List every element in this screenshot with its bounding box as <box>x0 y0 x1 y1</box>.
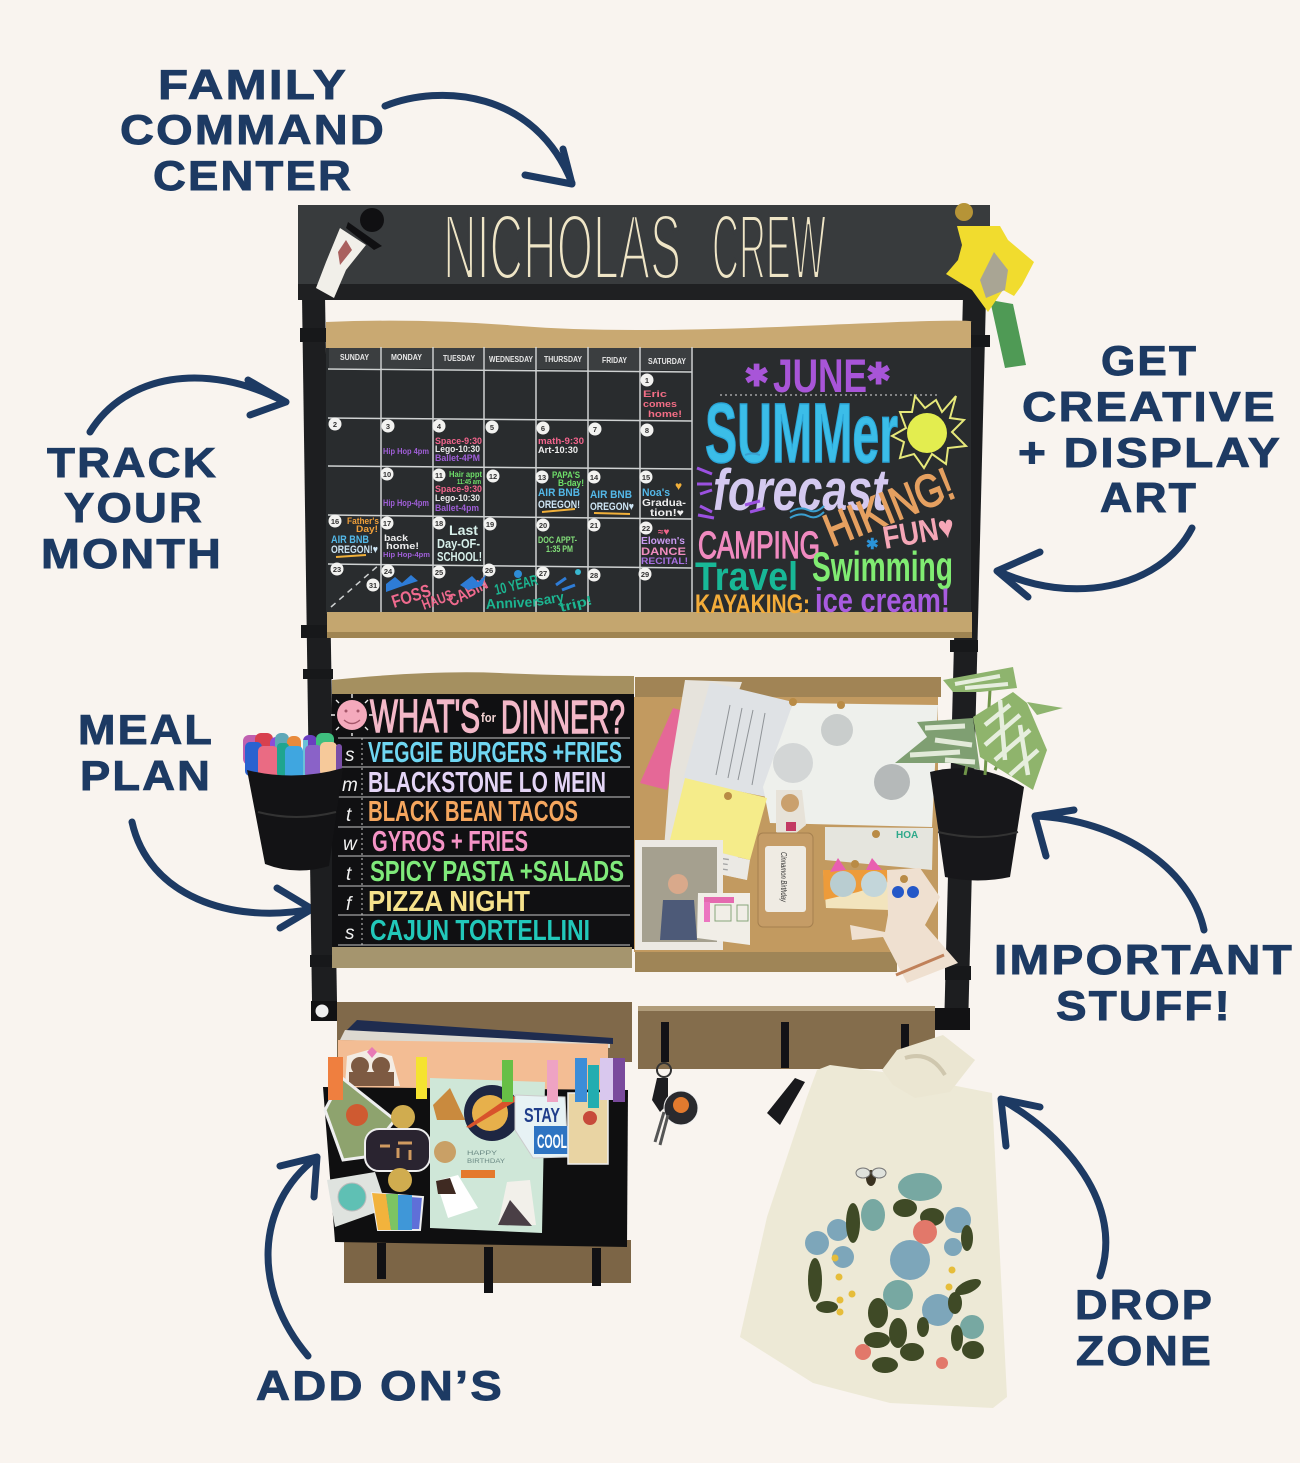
label: family command center: CENTER <box>153 152 353 199</box>
calendar entries: AIR BNB <box>331 534 369 546</box>
stay cool sticker: STAY <box>524 1105 560 1127</box>
calendar date circles: 6 <box>541 424 545 433</box>
icon: sun <box>892 396 966 468</box>
calendar entries: Eric <box>643 389 667 399</box>
calendar date circles: 10 <box>383 470 391 479</box>
icon: daffodil art on clip <box>946 203 1034 368</box>
calendar entries: ≈♥ <box>658 527 669 538</box>
ruled lines <box>338 738 630 945</box>
icon: keychain <box>652 1063 698 1145</box>
soap pack <box>327 1172 382 1227</box>
board name lettering: CREW <box>712 197 826 300</box>
calendar entries: back <box>384 533 409 543</box>
calendar weekday headers <box>329 348 691 370</box>
weekday letters: t <box>346 864 352 885</box>
cat drawing <box>823 858 890 910</box>
calendar date circles: 18 <box>435 519 443 528</box>
icon: car key fob <box>767 1078 805 1125</box>
calendar entries: Gradua- <box>642 498 686 509</box>
calendar entries: Last <box>449 522 478 538</box>
label: get creative and display art: + DISPLAY <box>1018 429 1282 476</box>
dog charm <box>776 790 806 838</box>
tarot card <box>568 1093 608 1164</box>
calendar weekday headers: TUESDAY <box>443 354 476 363</box>
weekday letters: t <box>346 805 352 826</box>
dance paper <box>663 840 750 880</box>
calendar entries: RECITAL! <box>641 556 688 566</box>
pink card <box>640 708 687 790</box>
calendar date circles: 13 <box>538 473 546 482</box>
stay cool sticker <box>515 1095 568 1158</box>
hiking: HIKING! <box>816 457 961 556</box>
summer: SUMMer <box>705 386 898 480</box>
calendar entries: math-9:30 <box>538 436 584 446</box>
calendar entries: Lego-10:30 <box>435 493 480 503</box>
label: get creative and display art <box>1018 337 1282 521</box>
embroidery flowers <box>805 1168 984 1373</box>
calendar entries: Noa's <box>642 487 670 499</box>
birthday card: BIRTHDAY <box>467 1159 505 1165</box>
calendar date circles: 25 <box>435 568 443 577</box>
tote handle knot <box>882 1035 975 1098</box>
white flyer <box>663 680 747 880</box>
meal list: PIZZA NIGHT <box>368 886 530 918</box>
bracket with date circle <box>311 1001 337 1021</box>
meal list: BLACKSTONE LO MEIN <box>368 767 606 799</box>
calendar entries: Ballet-4PM <box>435 453 480 463</box>
travel: Travel <box>695 555 798 599</box>
calendar entries: Hip Hop-4pm <box>383 552 430 559</box>
arrow: to meal board <box>132 822 312 928</box>
june heading: JUNE <box>773 349 867 402</box>
calendar weekday headers: MONDAY <box>391 353 423 362</box>
camping: CAMPING <box>698 525 820 567</box>
label: add on's: ADD ON’S <box>256 1362 504 1409</box>
calendar date circles: 16 <box>331 517 339 526</box>
calendar entries: DANCE <box>641 546 686 558</box>
icon: marker cup <box>243 733 343 871</box>
panel: corkboard <box>634 677 958 983</box>
calendar entries: Anniver <box>485 593 539 612</box>
panel: corkboard: HOA <box>896 830 918 841</box>
label: track your month: MONTH <box>41 530 223 577</box>
dinner title <box>370 690 625 743</box>
calendar date circles: 8 <box>645 426 649 435</box>
label: important stuff <box>994 936 1294 1029</box>
dinner title: for <box>481 710 496 725</box>
calendar entries: Father's <box>347 516 379 526</box>
calendar date circles: 2 <box>333 420 337 429</box>
yellow sticky note <box>670 778 767 860</box>
calendar entries: B-day! <box>558 478 584 488</box>
rainbow sticker <box>372 1168 423 1230</box>
calendar entries: DOC APPT- <box>538 535 577 545</box>
arrow: to header board <box>385 95 572 184</box>
calendar date circles: 12 <box>489 472 497 481</box>
calendar entries: comes <box>643 399 677 409</box>
calendar date circles: 27 <box>539 569 547 578</box>
calendar entries: FOSS <box>389 580 433 612</box>
calendar entries: AIR BNB <box>538 487 580 499</box>
luggage tag: Cinnamon Birthday <box>779 852 788 903</box>
panel: corkboard: DANCE <box>666 847 730 875</box>
arrow: to art chalkboard <box>997 528 1192 597</box>
weekday letters: s <box>345 923 355 944</box>
calendar date circles: 19 <box>486 520 494 529</box>
icon: potted plant <box>895 667 1063 880</box>
calendar entries: OREGON♥ <box>590 501 634 513</box>
label: important stuff: STUFF! <box>1056 982 1232 1029</box>
panel: what's for dinner board <box>331 672 634 968</box>
calendar entries: tion!♥ <box>650 508 684 519</box>
weekday letters: m <box>342 775 358 796</box>
calendar entries: trip! <box>558 592 594 615</box>
meal list: CAJUN TORTELLINI <box>370 915 590 947</box>
june heading: ✱ <box>866 358 891 391</box>
art: summer forecast lettering <box>695 349 966 620</box>
calendar entries: home! <box>386 541 419 551</box>
calendar entries: Elowen's <box>641 536 685 547</box>
calendar date circles: 1 <box>645 376 649 385</box>
icon: embroidered tote bag <box>740 1035 1007 1408</box>
label: drop zone: DROP <box>1075 1281 1214 1328</box>
label: drop zone <box>1075 1281 1214 1374</box>
label: get creative and display art: CREATIVE <box>1022 383 1277 430</box>
calendar entries: Day-OF- <box>437 536 480 551</box>
calendar entries: AIR BNB <box>590 489 632 501</box>
fun: FUN♥ <box>880 508 957 556</box>
label: track your month <box>41 439 223 577</box>
label: meal plan: PLAN <box>80 752 212 799</box>
arrow: to tote bag <box>1001 1099 1106 1276</box>
calendar grid <box>328 347 692 612</box>
notebook paper lines <box>716 705 765 785</box>
icon: dog charm on knob <box>316 208 384 298</box>
calendar entries <box>331 389 688 615</box>
swimming: Swimming <box>812 543 953 590</box>
label: family command center <box>120 61 386 199</box>
kayaking: KAYAKING: <box>695 589 810 619</box>
calendar entries: 10 YEAR <box>493 572 540 599</box>
hooks <box>377 1243 601 1293</box>
push pins <box>724 698 908 883</box>
calendar entries: SCHOOL! <box>437 549 482 564</box>
calendar date circles: 26 <box>485 566 493 575</box>
calendar weekday headers: WEDNESDAY <box>489 355 534 364</box>
hooks <box>661 1022 909 1068</box>
birthday card: HAPPY <box>467 1151 497 1157</box>
dog drawing <box>850 868 958 983</box>
calendar entries: HAUS <box>420 587 455 614</box>
label: get creative and display art: ART <box>1100 474 1198 521</box>
calendar date circles: 4 <box>437 422 442 431</box>
art: summer forecast lettering: ✱ <box>866 536 879 553</box>
arrow: to add-on folder <box>268 1157 317 1356</box>
icon: smiley sun <box>331 694 373 736</box>
label: get creative and display art: GET <box>1101 337 1198 384</box>
calendar entries: sary <box>535 588 565 609</box>
panel: key hook rail <box>638 1006 935 1145</box>
fox leaf sticker <box>325 1078 395 1160</box>
weekday letters: s <box>345 745 355 766</box>
calendar date circles: 3 <box>386 422 390 431</box>
calendar date circles: 31 <box>369 581 377 590</box>
luggage tag <box>758 833 813 927</box>
paw print art <box>763 703 938 827</box>
calendar date circles <box>328 374 654 592</box>
calendar entries: Space-9:30 <box>435 436 482 446</box>
hoa schedule <box>825 827 933 870</box>
arrow: to corkboard <box>1035 810 1204 930</box>
weekday letters: w <box>343 834 358 855</box>
child's house drawing <box>697 893 750 945</box>
calendar entries: Lego-10:30 <box>435 444 480 454</box>
otter sticker <box>345 1047 400 1086</box>
board name lettering: NICHOLAS <box>443 197 681 300</box>
calendar entries: OREGON!♥ <box>331 544 378 556</box>
mushroom sticker <box>365 1105 430 1171</box>
calendar entries: 1:35 PM <box>546 544 573 554</box>
bee <box>856 1168 886 1186</box>
arrow: to calendar <box>90 378 286 432</box>
panel: name header <box>298 197 990 300</box>
label: family command center: FAMILY <box>158 61 348 108</box>
ice cream: ice cream! <box>815 582 950 620</box>
stay cool sticker: COOL <box>537 1132 567 1153</box>
label: meal plan <box>78 706 214 799</box>
calendar entries: Day! <box>356 524 378 534</box>
family photo <box>635 840 723 950</box>
calendar weekday headers: FRIDAY <box>602 356 628 365</box>
dinner title: DINNER? <box>501 691 625 743</box>
calendar entries: CABIN <box>445 574 491 611</box>
calendar date circles: 21 <box>590 521 598 530</box>
calendar date circles: 14 <box>590 473 599 482</box>
calendar date circles: 11 <box>435 471 443 480</box>
calendar date circles: 28 <box>590 571 598 580</box>
calendar entries: 11:45 am <box>457 479 481 486</box>
weekday letters: f <box>346 894 353 915</box>
label: track your month: TRACK <box>47 439 218 486</box>
meal list: SPICY PASTA +SALADS <box>370 856 624 888</box>
calendar entries: ♥ <box>675 479 682 493</box>
calendar date circles: 29 <box>641 570 649 579</box>
calendar weekday headers: THURSDAY <box>544 355 583 364</box>
panel: calendar and art chalkboard <box>326 321 972 638</box>
calendar weekday headers: SATURDAY <box>648 357 687 366</box>
calendar entries: OREGON! <box>538 499 580 511</box>
calendar date circles: 22 <box>642 524 650 533</box>
calendar date circles: 7 <box>593 425 597 434</box>
label: meal plan: MEAL <box>78 706 214 753</box>
panel: add-on folder with stickers <box>323 1002 632 1293</box>
calendar date circles: 20 <box>539 521 547 530</box>
plant pot <box>930 768 1024 880</box>
label: important stuff: IMPORTANT <box>994 936 1294 983</box>
label: family command center: COMMAND <box>120 106 386 153</box>
calendar date circles: 15 <box>642 473 650 482</box>
weekday letters <box>342 745 358 944</box>
june heading <box>720 349 938 402</box>
dinner title: WHAT'S <box>370 690 480 742</box>
meal list <box>368 737 624 947</box>
forecast: forecast <box>713 458 889 523</box>
calendar date circles: 17 <box>383 519 391 528</box>
label: drop zone: ZONE <box>1076 1327 1213 1374</box>
calendar date circles: 5 <box>490 423 494 432</box>
june heading: ✱ <box>744 360 769 393</box>
calendar date circles: 23 <box>333 565 341 574</box>
calendar entries: Hair appt <box>449 470 482 479</box>
calendar entries: Ballet-4pm <box>435 503 479 513</box>
label: track your month: YOUR <box>64 484 204 531</box>
meal list: BLACK BEAN TACOS <box>368 796 578 828</box>
clothespins <box>328 1057 625 1108</box>
calendar entries: Hip Hop 4pm <box>383 447 429 456</box>
calendar entries: Space-9:30 <box>435 484 482 494</box>
calendar date circles: 24 <box>384 567 393 576</box>
calendar entries: home! <box>648 409 682 419</box>
meal list: VEGGIE BURGERS +FRIES <box>368 737 622 769</box>
calendar weekday headers: SUNDAY <box>340 353 370 362</box>
board frame <box>300 296 990 1030</box>
birthday card <box>430 1078 545 1233</box>
calendar entries: Hip Hop-4pm <box>383 498 429 508</box>
leaves <box>895 667 1063 790</box>
calendar entries: PAPA'S <box>552 470 580 480</box>
calendar entries: Art-10:30 <box>538 445 578 455</box>
meal list: GYROS + FRIES <box>372 826 528 858</box>
